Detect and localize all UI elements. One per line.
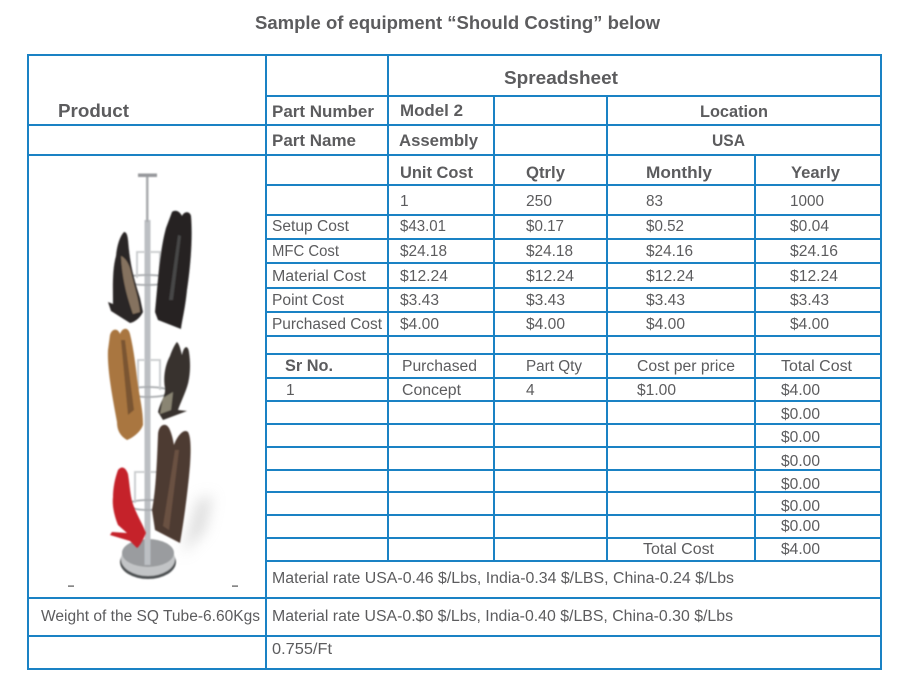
row: total cost: $4.00 <box>781 541 820 558</box>
note: material rate line 2: Material rate USA-0.$0 $/Lbs, India-0.40 $/LBS, China-0.30 $/Lbs <box>272 608 733 625</box>
empty row totals <box>781 406 820 535</box>
row: MFC cost: MFC Cost <box>272 243 340 260</box>
row: MFC cost <box>272 243 838 260</box>
row: part name and country: Assembly <box>399 131 479 150</box>
row: setup cost: $43.01 <box>400 218 446 235</box>
row: material cost: Material Cost <box>272 268 367 285</box>
empty row totals: $0.00 <box>781 453 820 470</box>
row: setup cost: $0.04 <box>790 218 829 235</box>
upper right shoes <box>155 211 192 329</box>
row: purchased part 1: $1.00 <box>637 382 676 399</box>
row: purchased part 1: Concept <box>402 382 462 399</box>
row: point cost <box>272 292 829 309</box>
row: purchased part 1: 1 <box>286 382 295 399</box>
row: purchased cost: Purchased Cost <box>272 316 383 333</box>
row: setup cost <box>272 218 829 235</box>
row: MFC cost: $24.18 <box>400 243 447 260</box>
row: part number and location: Model 2 <box>400 101 463 120</box>
spreadsheet heading: Spreadsheet <box>504 67 618 88</box>
row: point cost: $3.43 <box>526 292 565 309</box>
row: material cost: $12.24 <box>400 268 448 285</box>
row: part number and location: Location <box>700 102 768 121</box>
row: setup cost: $0.17 <box>526 218 564 235</box>
row: purchased parts headers: Cost per price <box>637 358 735 375</box>
red high heel shoe <box>110 467 146 548</box>
row: material cost: $12.24 <box>526 268 574 285</box>
middle right shoes <box>158 342 190 420</box>
row: part name and country: USA <box>712 131 745 150</box>
row: purchased cost: $4.00 <box>790 316 829 333</box>
row: MFC cost: $24.18 <box>526 243 573 260</box>
row: setup cost: $0.52 <box>646 218 684 235</box>
upper left shoe <box>108 232 143 323</box>
row: MFC cost: $24.16 <box>646 243 693 260</box>
row: cost period headers: Monthly <box>646 163 713 182</box>
row: purchased part 1 <box>286 382 820 399</box>
floor shadow <box>182 495 212 555</box>
note: rate per foot: 0.755/Ft <box>272 641 333 658</box>
lower right brown shoes <box>152 425 191 543</box>
row: part number and location <box>272 101 768 121</box>
row: purchased parts headers: Purchased <box>402 358 477 375</box>
row: cost period headers: Qtrly <box>526 163 566 182</box>
row: point cost: $3.43 <box>400 292 439 309</box>
row: part name and country <box>272 131 745 150</box>
row: part name and country: Part Name <box>272 131 356 150</box>
rack base <box>120 539 176 579</box>
row: quantities: 83 <box>646 193 663 210</box>
row: cost period headers: Unit Cost <box>400 163 473 182</box>
row: cost period headers: Yearly <box>791 163 841 182</box>
row: quantities <box>400 193 824 210</box>
row: point cost: $3.43 <box>790 292 829 309</box>
row: purchased cost: $4.00 <box>526 316 565 333</box>
rack pole and handle <box>138 174 157 565</box>
note: material rate line 1: Material rate USA-0.46 $/Lbs, India-0.34 $/LBS, China-0.24 $/Lbs <box>272 570 734 587</box>
row: quantities: 1 <box>400 193 409 210</box>
row: purchased cost: $4.00 <box>646 316 685 333</box>
title: Sample of equipment “Should Costing” below <box>255 12 661 33</box>
row: material cost: $12.24 <box>790 268 838 285</box>
product heading: Product <box>58 100 129 121</box>
wire shelves <box>121 252 173 510</box>
empty row totals: $0.00 <box>781 406 820 423</box>
row: purchased part 1: 4 <box>526 382 535 399</box>
product photo: shoe rack <box>68 174 238 587</box>
row: setup cost: Setup Cost <box>272 218 350 235</box>
row: purchased parts headers <box>285 356 853 375</box>
row: purchased parts headers: Part Qty <box>526 358 582 375</box>
row: purchased part 1: $4.00 <box>781 382 820 399</box>
middle left shoe <box>108 329 143 440</box>
row: purchased parts headers: Sr No. <box>285 356 333 375</box>
row: quantities: 250 <box>526 193 552 210</box>
row: material cost: $12.24 <box>646 268 694 285</box>
row: quantities: 1000 <box>790 193 824 210</box>
empty row totals: $0.00 <box>781 476 820 493</box>
row: total cost <box>643 541 820 558</box>
row: part number and location: Part Number <box>272 102 374 121</box>
row: MFC cost: $24.16 <box>790 243 838 260</box>
empty row totals: $0.00 <box>781 518 820 535</box>
row: purchased parts headers: Total Cost <box>781 358 853 375</box>
row: purchased cost <box>272 316 829 333</box>
row: total cost: Total Cost <box>643 541 715 558</box>
row: cost period headers <box>400 163 841 182</box>
row: material cost <box>272 268 838 285</box>
empty row totals: $0.00 <box>781 498 820 515</box>
photo crop marks <box>68 586 238 587</box>
note: tube weight: Weight of the SQ Tube-6.60Kgs <box>41 608 260 625</box>
row: point cost: $3.43 <box>646 292 685 309</box>
row: point cost: Point Cost <box>272 292 345 309</box>
row: purchased cost: $4.00 <box>400 316 439 333</box>
empty row totals: $0.00 <box>781 429 820 446</box>
